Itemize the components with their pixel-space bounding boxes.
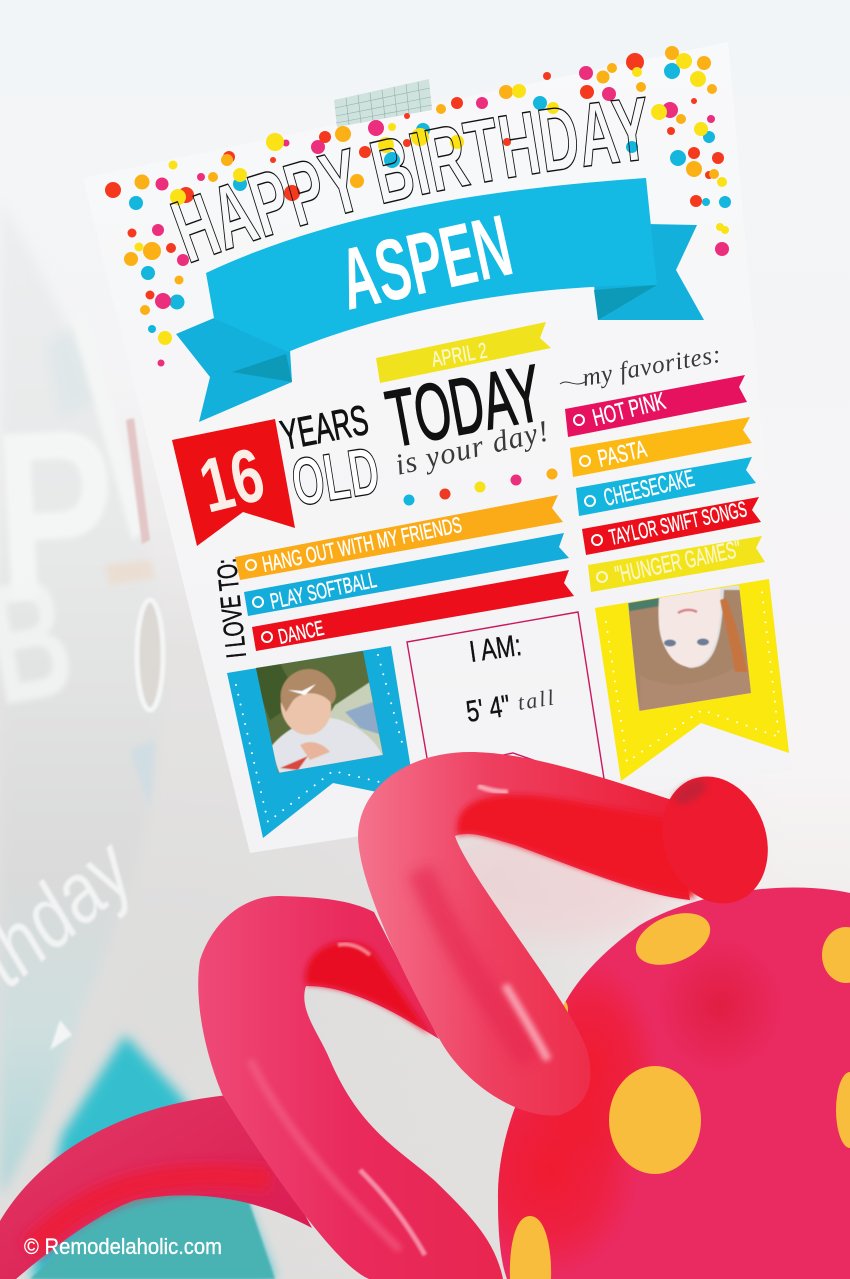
name banner bbox=[176, 178, 704, 422]
years old: OLD bbox=[287, 433, 384, 521]
years old bbox=[277, 396, 384, 521]
love: softball: PLAY SOFTBALL bbox=[268, 567, 379, 614]
love: hang out: HANG OUT WITH MY FRIENDS bbox=[260, 512, 464, 577]
favorite: pasta bbox=[570, 417, 752, 477]
watermark: Remodelaholic.com: © Remodelaholic.com bbox=[24, 1234, 222, 1259]
polka dot balloon bbox=[460, 888, 850, 1279]
favorite: taylor swift songs bbox=[582, 496, 761, 555]
love: dance bbox=[252, 570, 574, 651]
love: dance: DANCE bbox=[276, 617, 326, 649]
favorite: taylor swift songs: TAYLOR SWIFT SONGS bbox=[607, 496, 749, 550]
balloon shadow on wall bbox=[440, 820, 680, 940]
confetti dots bbox=[105, 46, 731, 366]
date ribbon bbox=[376, 322, 551, 383]
I am panel bbox=[407, 612, 605, 785]
my favorites heading: my favorites: bbox=[580, 341, 723, 392]
name text: ASPEN bbox=[331, 197, 520, 329]
washi tape bbox=[334, 79, 432, 127]
balloon knob bbox=[645, 761, 785, 919]
today heading: TODAY bbox=[380, 348, 549, 464]
shaded lower wall bbox=[0, 350, 850, 1279]
favorite: hot pink: HOT PINK bbox=[590, 388, 668, 432]
teal surface bbox=[30, 1035, 275, 1279]
yellow photo flag bbox=[595, 579, 789, 781]
age flag: 16 bbox=[172, 419, 295, 546]
baby photo bbox=[256, 651, 383, 773]
favorite: cheesecake bbox=[576, 457, 756, 516]
favorite: hot pink bbox=[565, 375, 747, 437]
polka dots bbox=[510, 903, 850, 1279]
favorite: pasta: PASTA bbox=[595, 436, 649, 473]
I am panel: I AM: bbox=[467, 629, 523, 669]
main banner body bbox=[206, 178, 657, 352]
favorite: hunger games: "HUNGER GAMES" bbox=[613, 536, 743, 589]
love: softball bbox=[244, 533, 569, 616]
row of five dots bbox=[404, 468, 558, 506]
love-to list bbox=[235, 495, 574, 651]
paper poster sheet bbox=[83, 42, 792, 853]
balloon tube: middle twist bbox=[198, 896, 503, 1279]
right tail bbox=[594, 224, 704, 320]
is your day script: is your day! bbox=[392, 415, 552, 482]
favorite: cheesecake: CHEESECAKE bbox=[601, 465, 697, 512]
heading: Happy Birthday outlined: HAPPY BIRTHDAY bbox=[170, 96, 646, 264]
I am panel: tall bbox=[516, 685, 555, 715]
blue photo flag bbox=[227, 645, 416, 838]
left tail bbox=[176, 318, 292, 422]
favorite: hunger games bbox=[588, 536, 765, 592]
balloon tube: lower left bbox=[0, 1094, 312, 1279]
balloon tube: upper twist bbox=[358, 752, 695, 1115]
girl photo bbox=[628, 585, 751, 711]
I love to label: I LOVE TO: bbox=[211, 557, 252, 660]
clear balloon with blurred print bbox=[0, 200, 164, 1197]
age flag: 16: 16 bbox=[192, 432, 272, 529]
I am panel: 5' 4" bbox=[464, 689, 513, 729]
date ribbon: APRIL 2 bbox=[430, 338, 489, 372]
favorites list bbox=[565, 375, 765, 592]
banner folds bbox=[594, 285, 657, 320]
years old: YEARS bbox=[277, 396, 372, 459]
